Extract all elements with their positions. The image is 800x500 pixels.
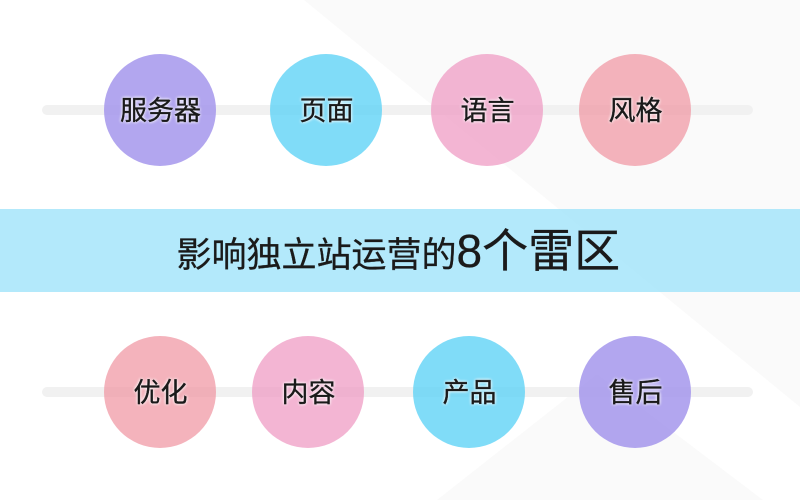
circle: 售后: 售后 [608,378,662,408]
top row: timeline track and four circles [42,54,752,166]
circle: 服务器 [104,54,216,166]
circle: 风格 [579,54,691,166]
circle: 产品 [413,336,525,448]
title band [0,209,800,292]
circle: 优化: 优化 [134,378,188,408]
circle: 页面 [270,54,382,166]
circle: 售后 [579,336,691,448]
circle: 内容: 内容 [282,378,336,408]
bottom timeline track [42,387,753,397]
circle: 页面: 页面 [300,96,354,126]
circle: 风格: 风格 [608,96,662,126]
circle: 语言: 语言 [460,96,514,126]
circle: 服务器: 服务器 [120,96,201,126]
circle: 内容 [252,336,364,448]
circle: 产品: 产品 [442,378,496,408]
circle: 优化 [104,336,216,448]
title text: 影响独立站运营的8个雷区 [176,225,620,277]
top timeline track [42,105,753,115]
bottom row: timeline track and four circles [42,336,753,448]
circle: 语言 [431,54,543,166]
